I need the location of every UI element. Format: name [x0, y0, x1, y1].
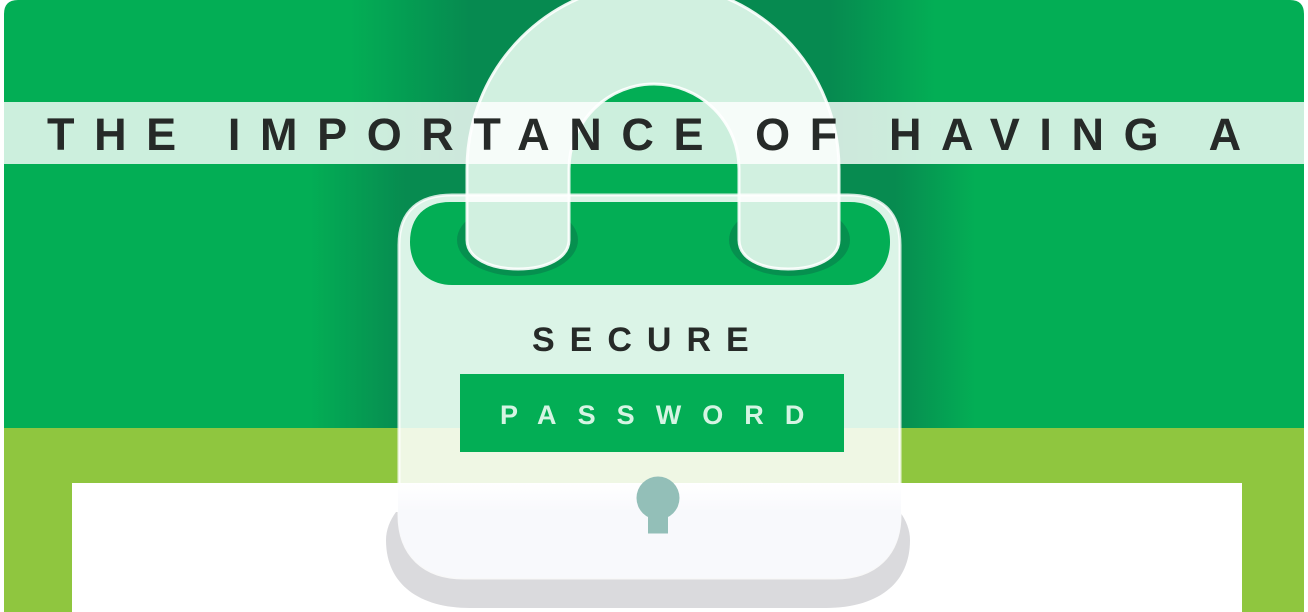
heading: secure: SECURE — [532, 321, 764, 359]
left shackle socket — [457, 204, 578, 276]
title text: THE IMPORTANCE OF HAVING A — [47, 109, 1261, 160]
panel: green background — [4, 0, 1304, 428]
lock body — [399, 195, 900, 578]
lock lower body — [398, 483, 901, 578]
right shackle socket — [729, 204, 850, 276]
lock shadow on green — [310, 0, 975, 428]
right leg backing — [739, 202, 839, 269]
keyhole — [636, 476, 680, 534]
left leg backing — [467, 202, 569, 269]
lock window — [410, 202, 890, 285]
flat green behind lock — [399, 0, 900, 428]
password box — [460, 374, 844, 452]
heading: password: PASSWORD — [500, 400, 825, 430]
shackle — [467, 0, 839, 269]
panel: white content area — [72, 483, 1242, 612]
lock base shadow — [386, 512, 910, 608]
title band — [4, 102, 1304, 164]
panel: lime footer band — [4, 428, 1304, 612]
padlock — [386, 0, 910, 608]
